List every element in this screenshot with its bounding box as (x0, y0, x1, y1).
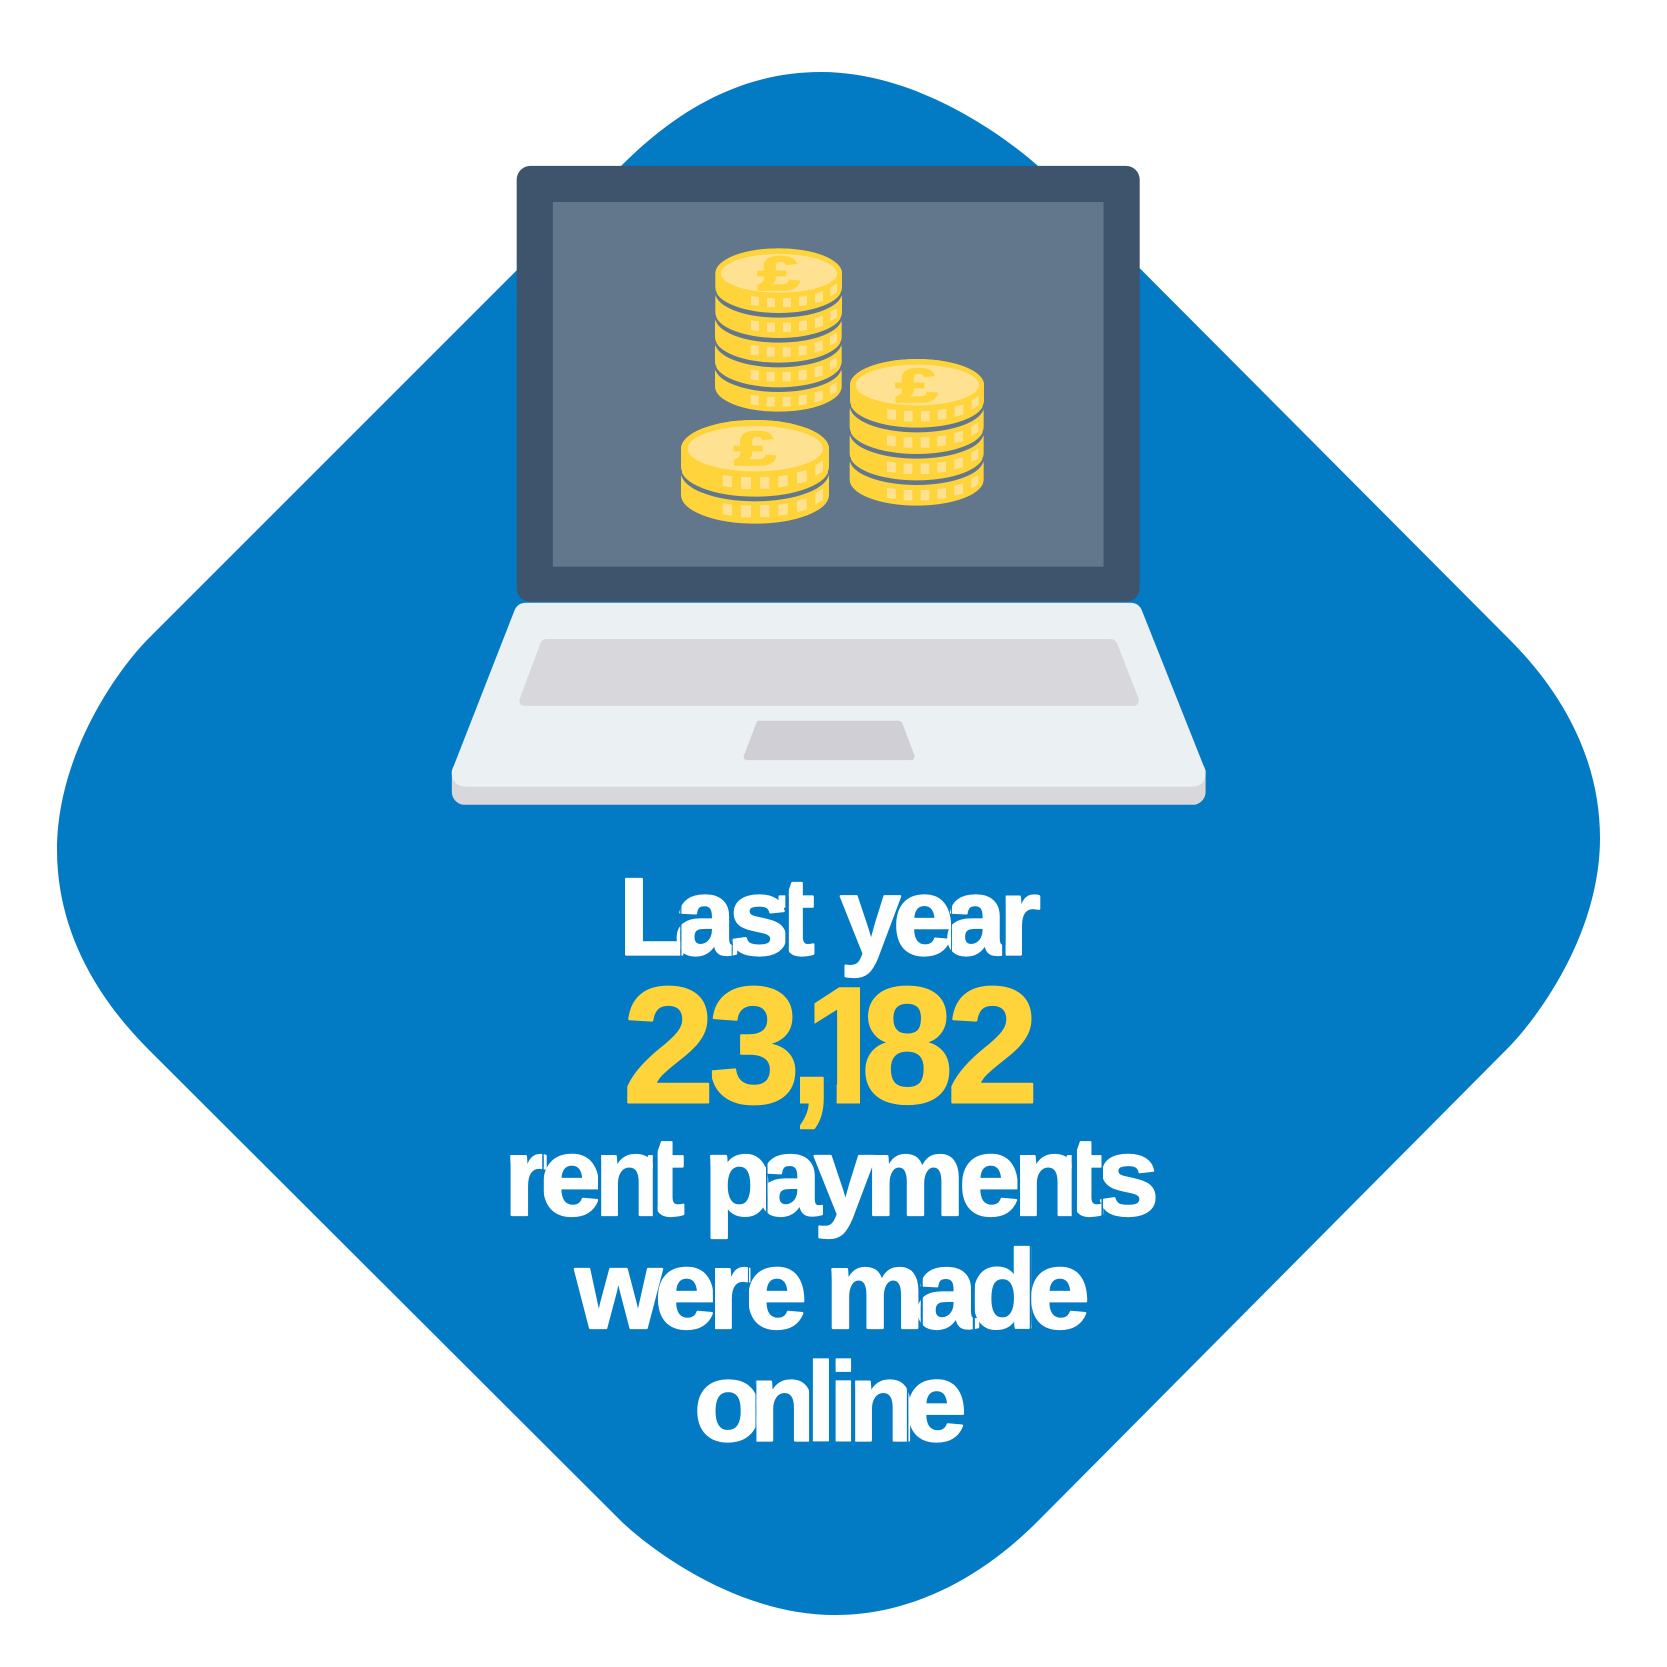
coin stack: bottom left (681, 420, 829, 530)
laptop deck (452, 603, 1206, 787)
laptop (452, 166, 1206, 805)
text: online: online (694, 1340, 967, 1465)
screen bezel (517, 166, 1140, 602)
number digit 1: 1 (799, 953, 892, 1138)
coin stack: top left: £ (758, 247, 800, 301)
coin stack: right (850, 359, 984, 511)
laptop base edge (452, 760, 1206, 805)
keyboard (519, 639, 1139, 706)
number digits 82: 82 (861, 953, 1039, 1138)
icon: pound coins (681, 247, 984, 530)
screen (553, 202, 1104, 567)
headline text (504, 857, 1159, 1465)
big number (627, 986, 1034, 1130)
text: rent payments: rent payments (504, 1114, 1159, 1239)
coin stack: top left (715, 247, 842, 417)
text: last year: Last year (619, 857, 1041, 979)
text: were made: were made (574, 1227, 1090, 1352)
coin stack: bottom left: £ (734, 422, 776, 476)
trackpad (744, 721, 914, 760)
number digits 23,: 23, (623, 953, 834, 1138)
coin stack: right: £ (896, 359, 938, 413)
